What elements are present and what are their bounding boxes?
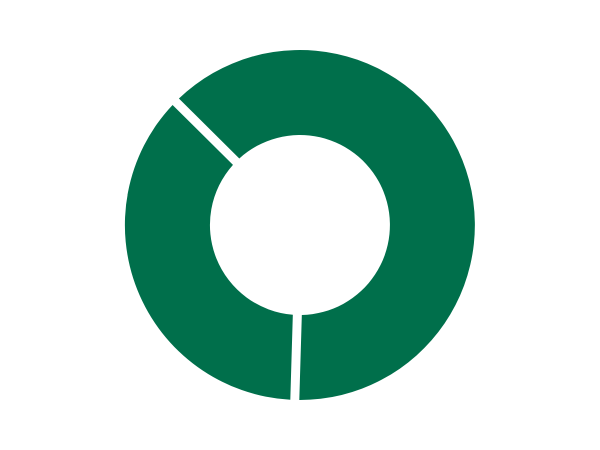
segment: large green slice (179, 50, 475, 400)
segment: small green slice (125, 105, 293, 400)
